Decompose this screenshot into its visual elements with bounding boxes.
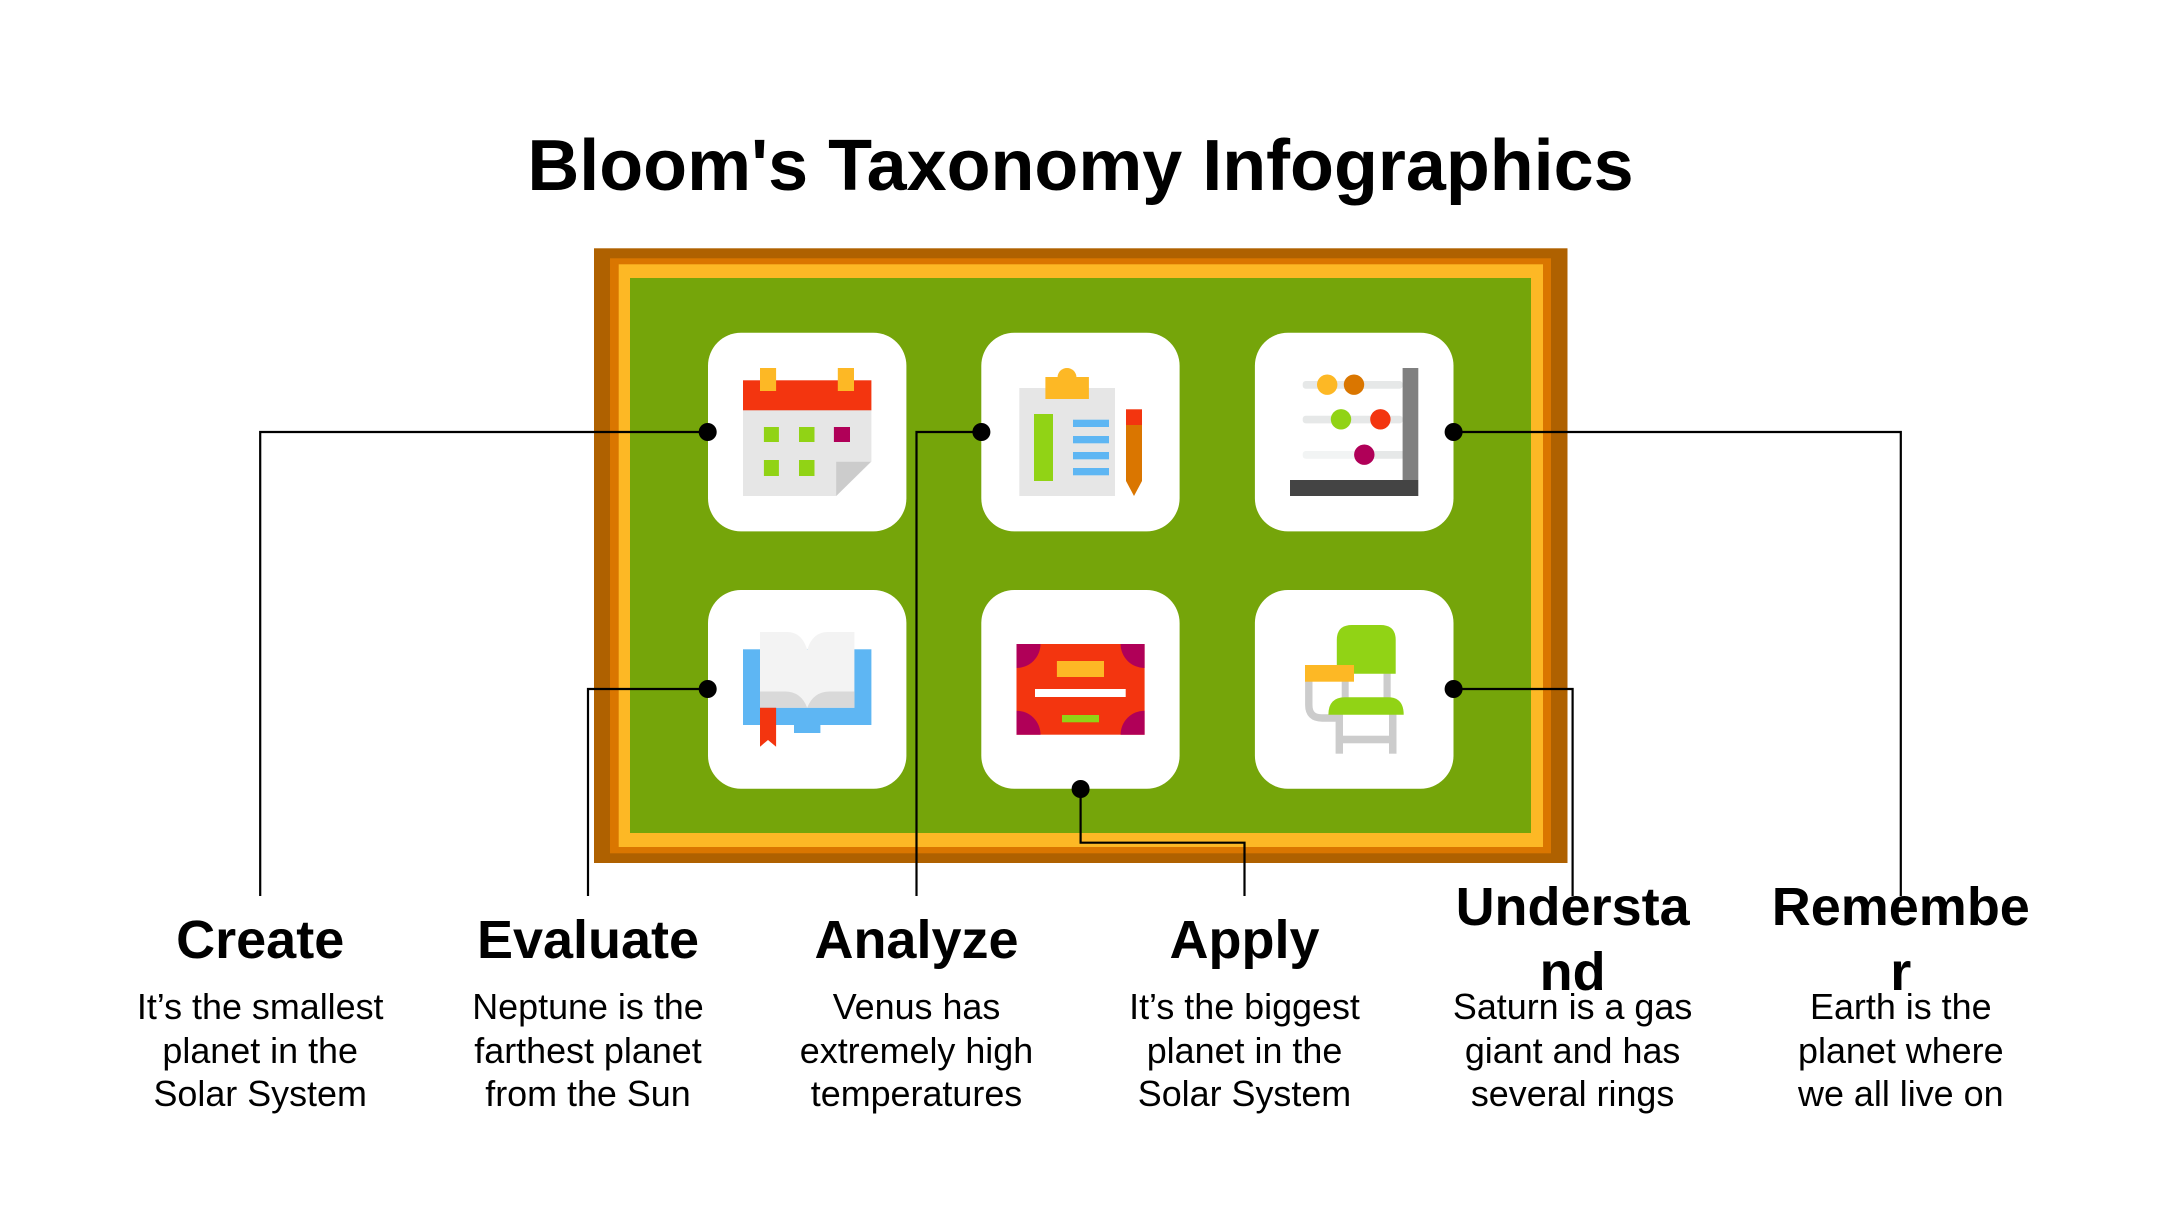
connector: Apply — [1072, 780, 1244, 896]
description: Apply: planet in the — [1147, 1031, 1342, 1071]
title: Bloom's Taxonomy Infographics — [527, 126, 1634, 206]
board frame — [594, 248, 1568, 863]
card: clipboard — [981, 333, 1180, 531]
connector: Create — [260, 423, 717, 896]
description: Remember: planet where — [1798, 1031, 2004, 1071]
connector: Remember — [1445, 423, 1901, 896]
description: Create: It’s the smallest — [137, 987, 384, 1027]
icon: school desk chair — [1305, 625, 1404, 754]
card: certificate — [981, 590, 1180, 789]
heading: Evaluate: Evaluate — [477, 910, 699, 970]
description: Create — [137, 987, 384, 1114]
description: Create: Solar System — [153, 1074, 367, 1114]
description: Evaluate: from the Sun — [485, 1074, 691, 1114]
description: Create: planet in the — [162, 1031, 358, 1071]
connector: Understand — [1445, 680, 1573, 896]
column: Remember — [1772, 877, 2030, 1114]
column: Evaluate — [472, 910, 704, 1114]
icon: abacus — [1290, 368, 1418, 496]
description: Analyze: Venus has — [833, 987, 1000, 1027]
description: Remember: Earth is the — [1810, 987, 1992, 1027]
column: Apply — [1129, 910, 1360, 1114]
description: Apply: Solar System — [1138, 1074, 1351, 1114]
card: abacus — [1255, 333, 1454, 531]
heading: Create: Create — [176, 910, 344, 970]
description: Analyze: temperatures — [811, 1074, 1022, 1114]
column: Create — [137, 910, 384, 1114]
card: calendar — [708, 333, 906, 531]
description: Evaluate: farthest planet — [474, 1031, 702, 1071]
card: book — [708, 590, 906, 789]
card: chair — [1255, 590, 1454, 789]
icon: calendar — [743, 368, 871, 496]
description: Understand: giant and has — [1465, 1031, 1680, 1071]
heading: Understand: Understand — [1456, 877, 1690, 1002]
description: Understand: several rings — [1471, 1074, 1674, 1114]
column: Understand — [1453, 877, 1692, 1114]
heading: Analyze: Analyze — [814, 910, 1019, 970]
description: Analyze — [800, 987, 1033, 1114]
heading: Remember: Remember — [1772, 877, 2030, 1002]
description: Remember: we all live on — [1798, 1074, 2004, 1114]
connector: Analyze — [916, 423, 990, 896]
description: Analyze: extremely high — [800, 1031, 1033, 1071]
icon: certificate — [1016, 644, 1145, 735]
icon: clipboard and pencil — [1019, 368, 1142, 496]
icon: open book — [743, 632, 871, 747]
description: Evaluate: Neptune is the — [472, 987, 704, 1027]
description: Understand: Saturn is a gas — [1453, 987, 1692, 1027]
description: Apply — [1129, 987, 1360, 1114]
connector: Evaluate — [588, 680, 717, 896]
description: Remember — [1798, 987, 2004, 1114]
description: Apply: It’s the biggest — [1129, 987, 1360, 1027]
heading: Apply: Apply — [1169, 910, 1320, 970]
description: Evaluate — [472, 987, 704, 1114]
description: Understand — [1453, 987, 1692, 1114]
column: Analyze — [800, 910, 1033, 1114]
